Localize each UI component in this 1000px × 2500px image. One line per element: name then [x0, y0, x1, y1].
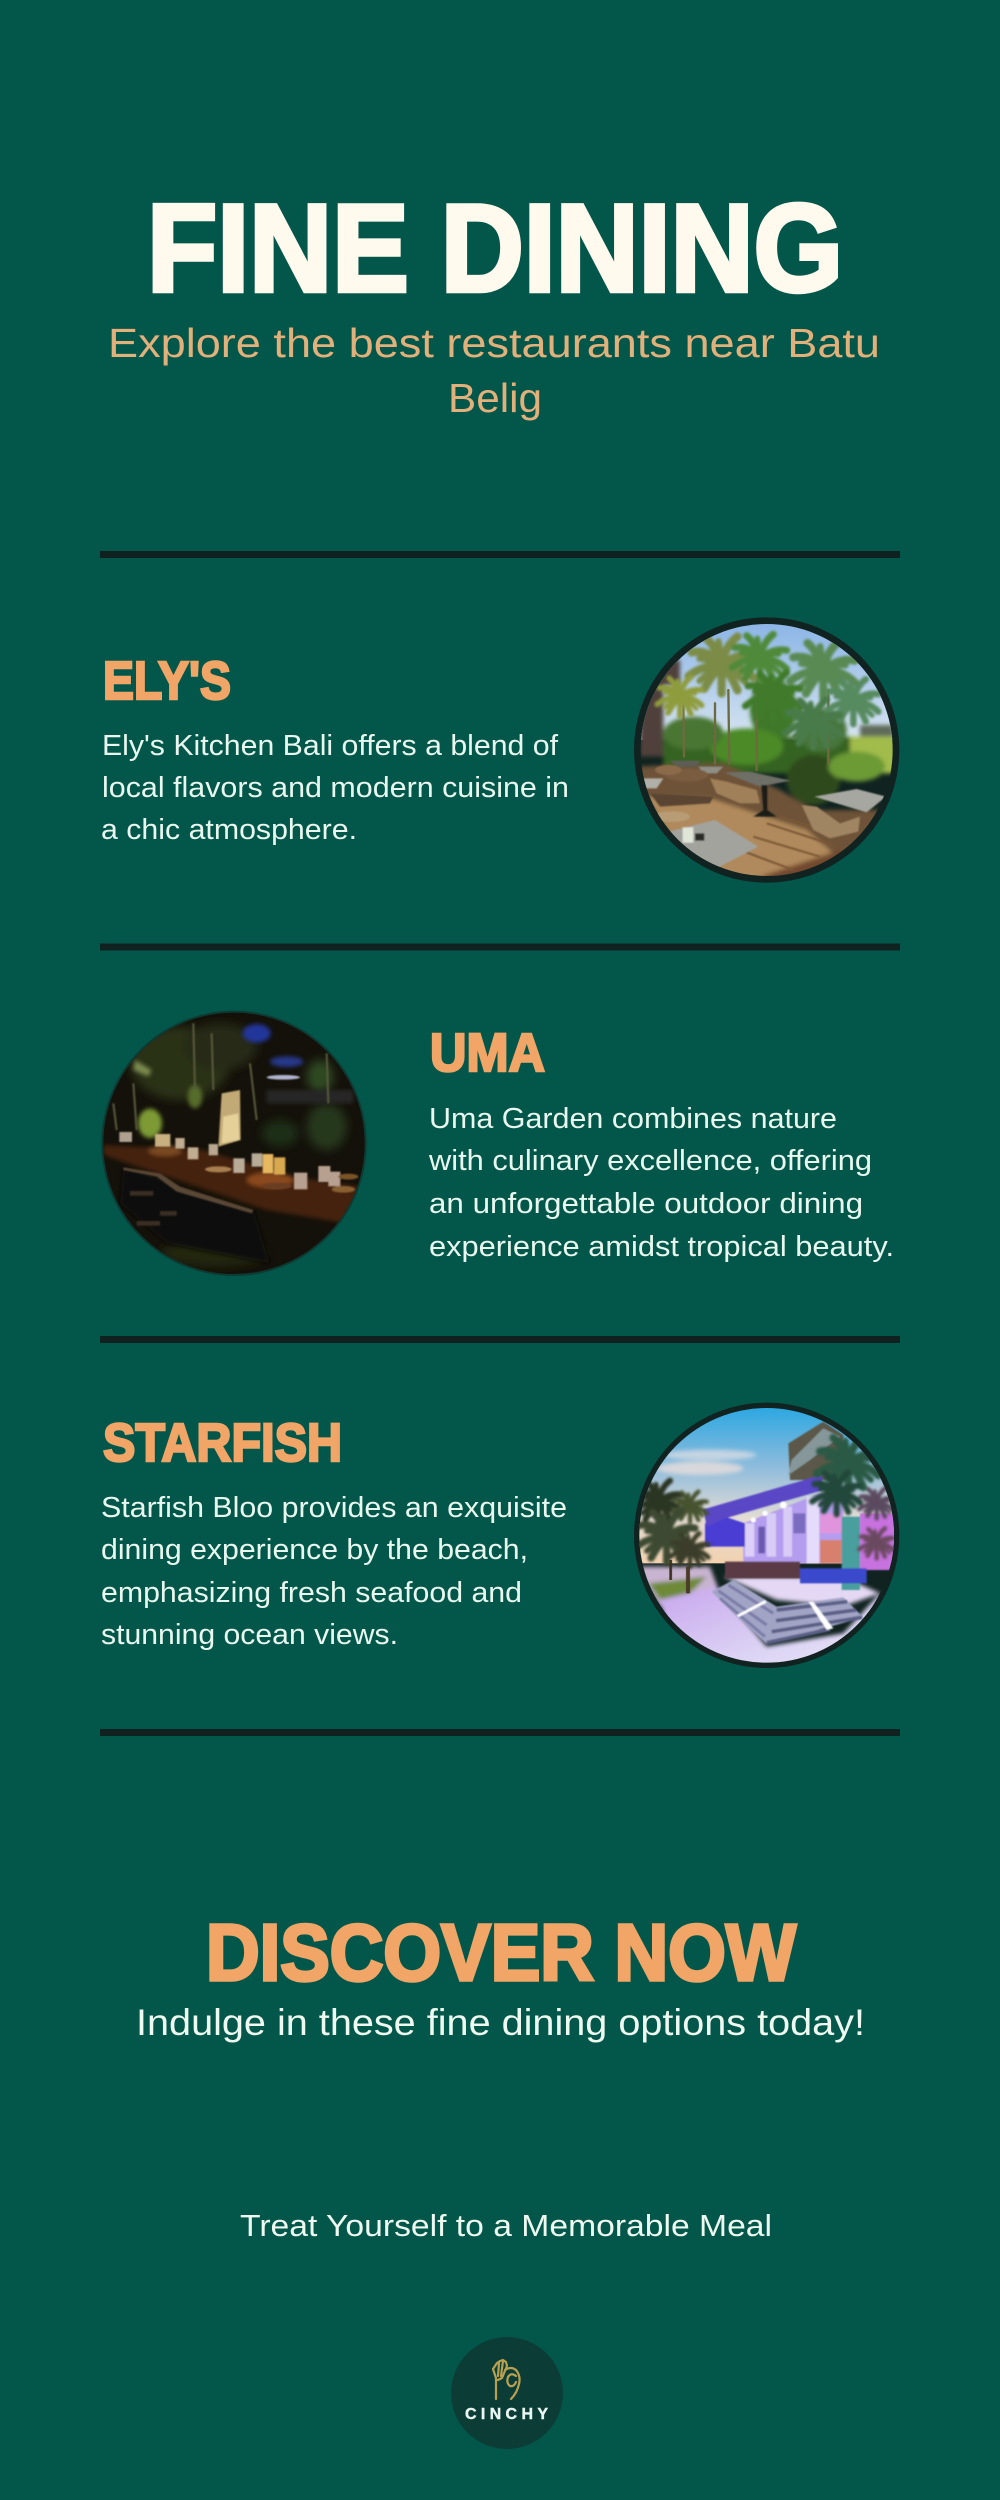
subtitle: Belig	[448, 375, 542, 421]
panel: Uma	[100, 1010, 894, 1280]
text: Uma description	[428, 1103, 894, 1263]
text: Starfish description: Starfish Bloo provides an exquisite	[101, 1492, 567, 1524]
icon: hand gesture	[493, 2360, 520, 2399]
text: Ely's description: Ely's Kitchen Bali offers a blend of	[102, 730, 559, 762]
heading: Starfish: STARFISH	[103, 1413, 342, 1473]
text: Uma description: an unforgettable outdoor dining	[429, 1188, 863, 1220]
text: Starfish description: dining experience by the beach,	[101, 1534, 528, 1566]
photo: terrace with palms	[633, 617, 900, 890]
panel: Starfish	[101, 1403, 900, 1673]
title: FINE DINING	[147, 180, 843, 318]
text: Uma description: Uma Garden combines nature	[429, 1103, 837, 1135]
text: Starfish description: emphasizing fresh seafood and	[101, 1577, 522, 1609]
heading: Ely's: ELY'S	[103, 651, 231, 711]
subtitle: Explore the best restaurants near Batu	[108, 320, 880, 366]
logo: Cinchy	[451, 2337, 563, 2449]
photo: beach restaurant at dusk	[633, 1403, 900, 1673]
text: Uma description: with culinary excellence, offering	[428, 1145, 872, 1177]
text: Uma description: experience amidst tropical beauty.	[429, 1231, 894, 1263]
text: Ely's description: a chic atmosphere.	[101, 814, 357, 846]
call to action heading: DISCOVER NOW	[206, 1908, 796, 1997]
text: Starfish description	[101, 1492, 567, 1651]
text: Starfish description: stunning ocean views.	[101, 1619, 398, 1651]
subtitle	[108, 320, 880, 421]
heading: Uma: UMA	[430, 1023, 545, 1083]
wordmark: CINCHY	[465, 2406, 548, 2423]
photo: night garden table	[100, 1010, 370, 1280]
text: Ely's description	[101, 730, 569, 846]
call to action text: Indulge in these fine dining options today!	[136, 2002, 865, 2043]
tagline: Treat Yourself to a Memorable Meal	[240, 2208, 772, 2243]
panel: Ely's	[101, 617, 900, 890]
text: Ely's description: local flavors and modern cuisine in	[102, 772, 569, 804]
